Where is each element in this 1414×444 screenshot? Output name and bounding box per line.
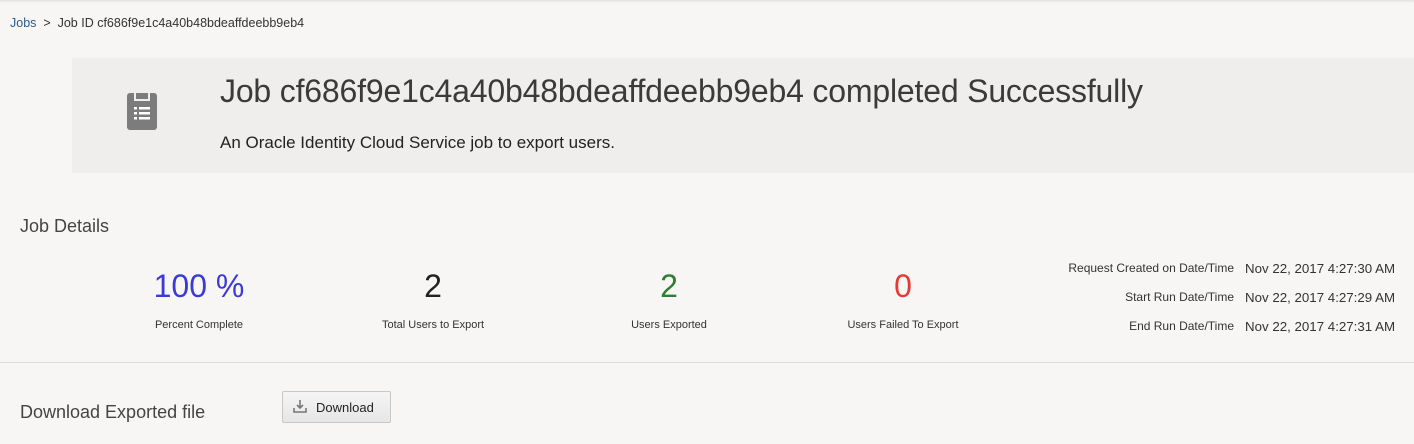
dates: Nov 22, 2017 4:27:30 AM bbox=[1245, 261, 1395, 276]
download label: Download Exported file bbox=[20, 402, 205, 422]
icon: clipboard bbox=[127, 93, 157, 130]
download button: Download bbox=[316, 400, 374, 415]
dates: Nov 22, 2017 4:27:31 AM bbox=[1245, 319, 1395, 334]
metric: failed: 0 bbox=[894, 268, 912, 304]
title: Job cf686f9e1c4a40b48bdeaffdeebb9eb4 completed Successfully bbox=[220, 73, 1143, 109]
metric: failed: Users Failed To Export bbox=[847, 319, 959, 331]
metric: total bbox=[382, 268, 484, 331]
metric: exported: 2 bbox=[660, 268, 678, 304]
dates bbox=[1068, 261, 1395, 334]
metric: percent: Percent Complete bbox=[155, 319, 243, 331]
download button bbox=[282, 391, 391, 423]
dates: Nov 22, 2017 4:27:29 AM bbox=[1245, 290, 1395, 305]
dates: Start Run Date/Time bbox=[1125, 290, 1234, 304]
dates: Request Created on Date/Time bbox=[1068, 261, 1234, 275]
metric: total: Total Users to Export bbox=[382, 319, 484, 331]
dates: End Run Date/Time bbox=[1129, 319, 1234, 333]
metric: exported bbox=[631, 268, 707, 331]
metric: total: 2 bbox=[424, 268, 442, 304]
heading: job details: Job Details bbox=[20, 216, 109, 236]
metric: percent: 100 % bbox=[154, 268, 244, 304]
metric: exported: Users Exported bbox=[631, 319, 707, 331]
subtitle: An Oracle Identity Cloud Service job to export users. bbox=[220, 133, 615, 152]
top shadow bbox=[0, 0, 1414, 3]
metric: percent bbox=[154, 268, 244, 331]
breadcrumb: Jobs > Job ID cf686f9e1c4a40b48bdeaffdeebb9eb4 bbox=[10, 16, 304, 30]
header panel bbox=[72, 58, 1414, 173]
metric: failed bbox=[847, 268, 959, 331]
